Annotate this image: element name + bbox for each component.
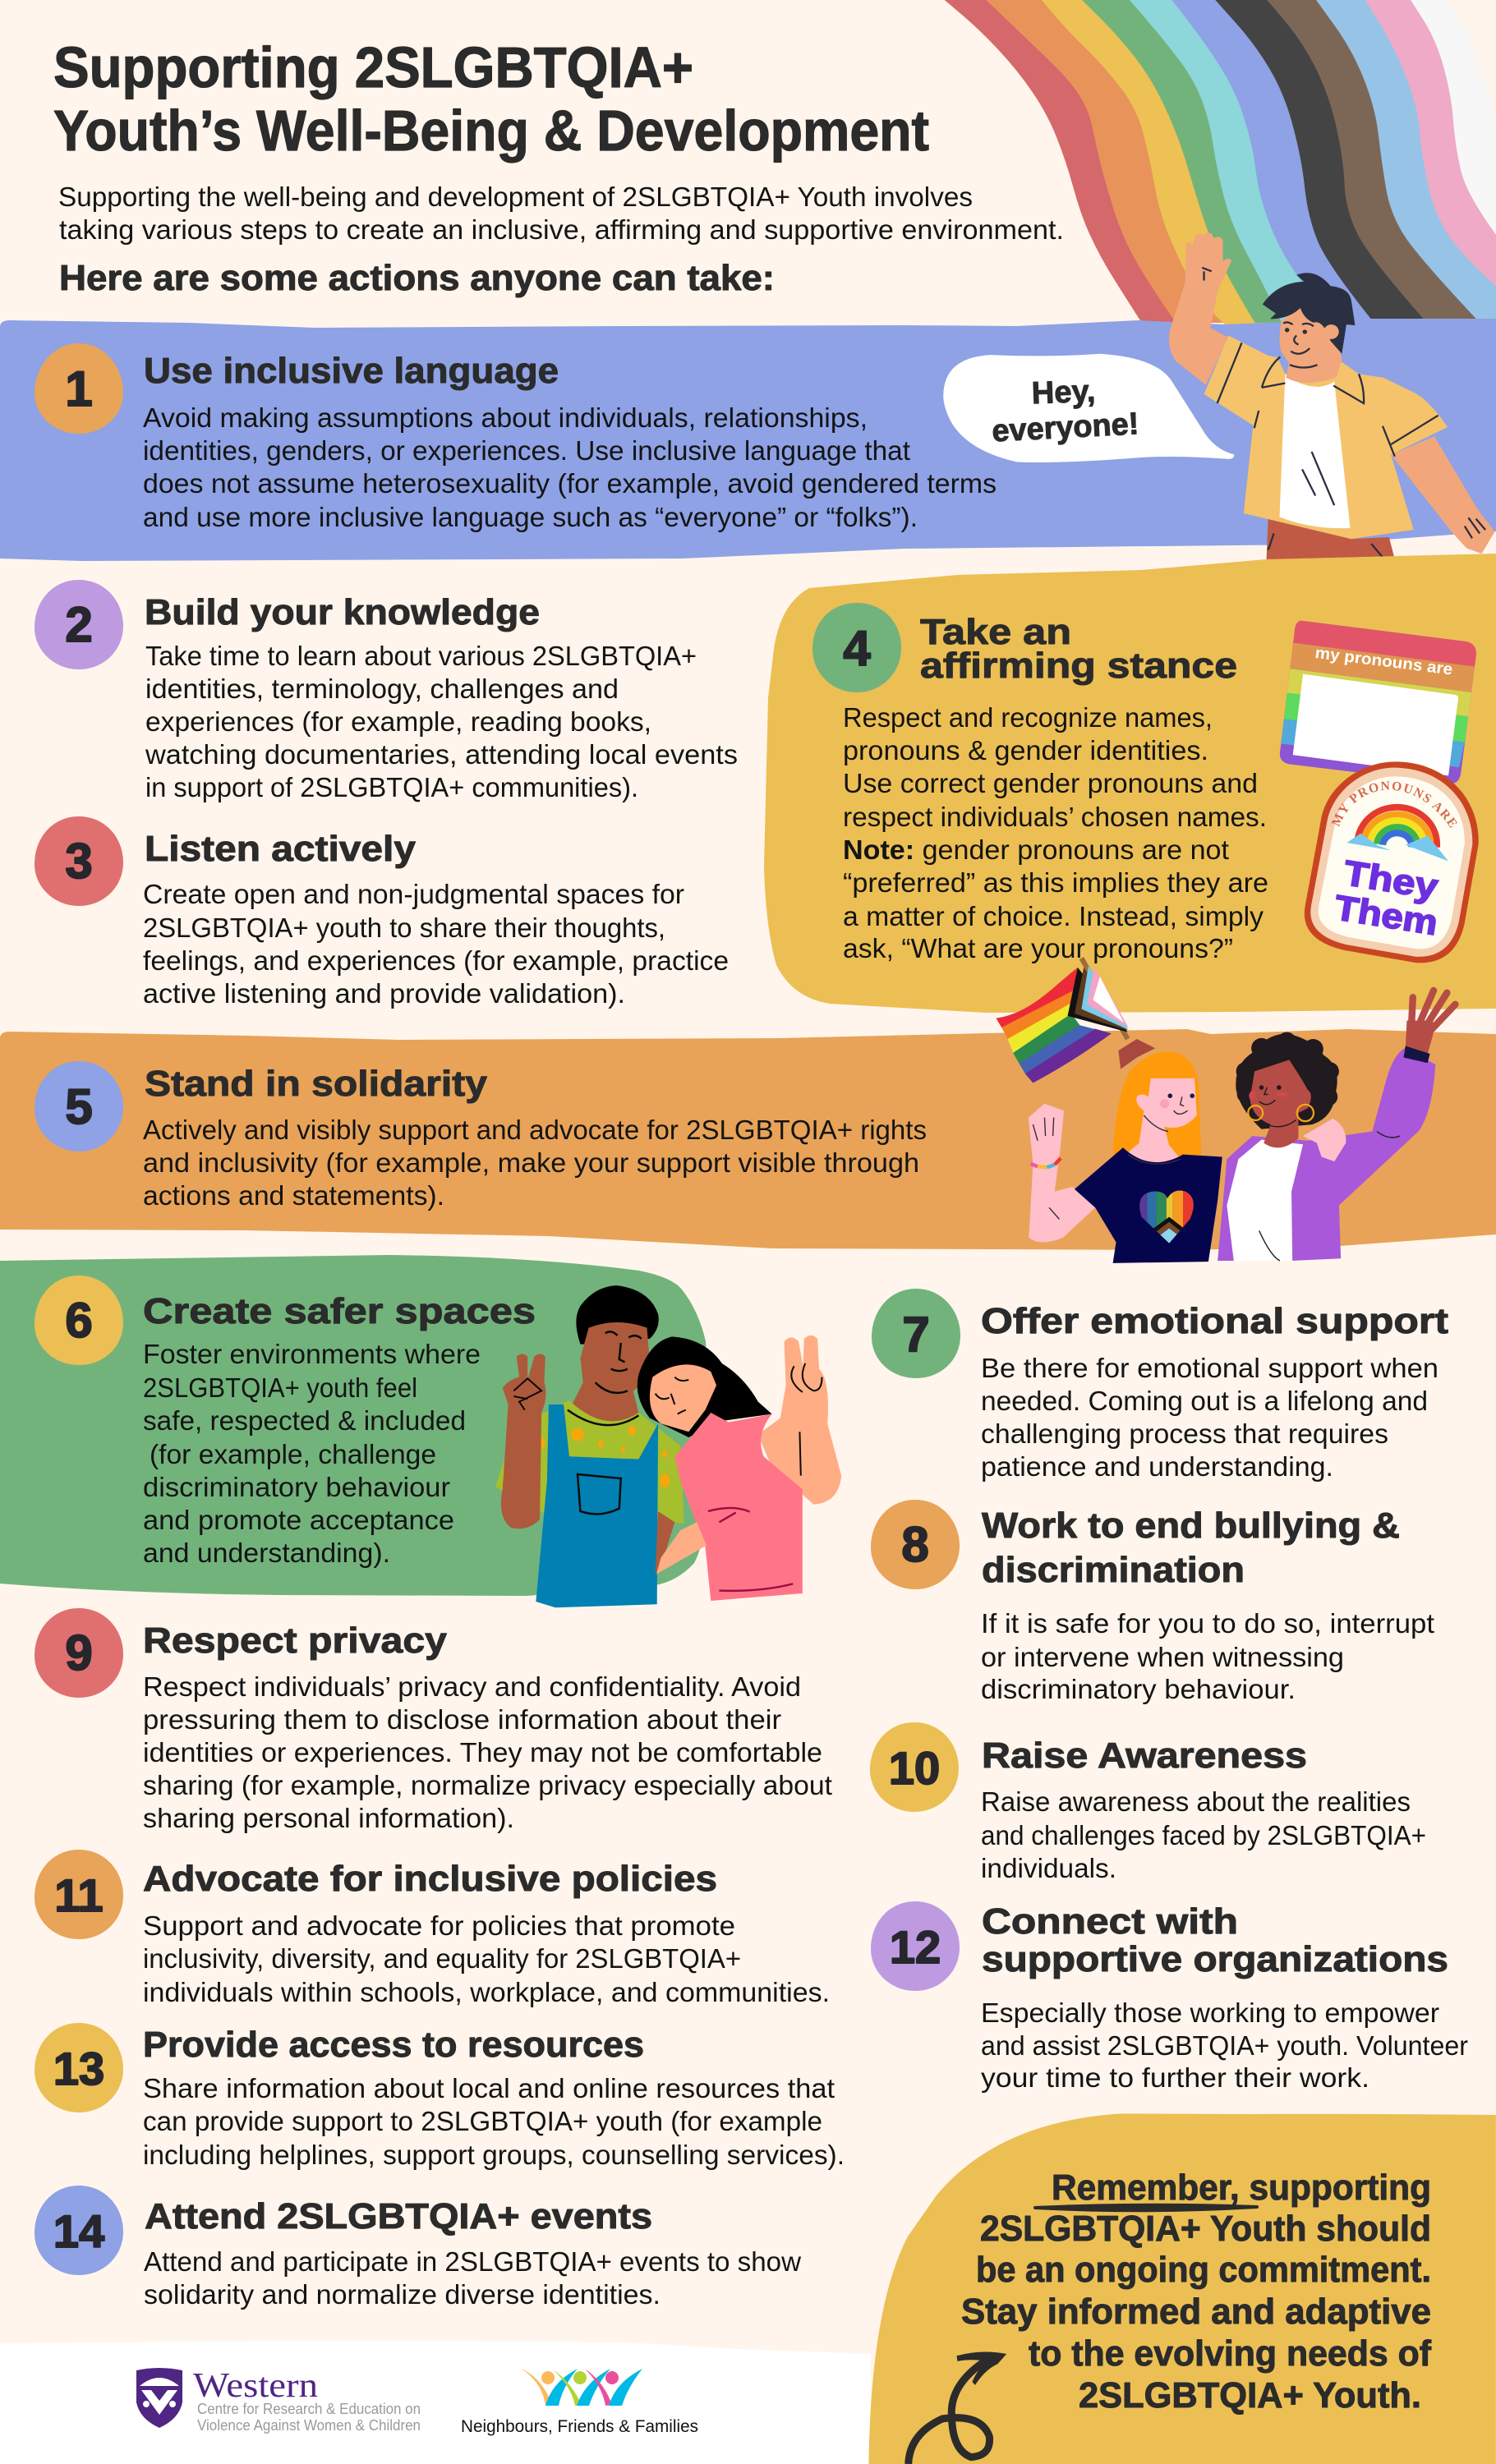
body 8: discriminatory behaviour. [981,1674,1296,1704]
body 4: Use correct gender pronouns and [843,768,1258,798]
step 11: advocate for inclusive policies [35,1850,830,2007]
panel: step 1 blue band [0,319,1496,561]
body 4: pronouns & gender identities. [843,735,1208,765]
logo: Western University: Violence Against Women & Children [197,2417,421,2434]
step 7: offer emotional support [872,1289,1448,1482]
callout text: to the evolving needs of [1029,2333,1431,2374]
body 4: ask, “What are your pronouns?” [843,933,1233,963]
heading 11: Advocate for inclusive policies [143,1859,717,1899]
heading 4: affirming stance [920,646,1237,686]
step 2: build your knowledge [35,580,738,802]
badge 2 [35,580,123,669]
They/Them pronoun badge: MY PRONOUNS ARE [1331,781,1457,828]
badge 10 [870,1722,959,1812]
body 10: Raise awareness about the realities [981,1786,1411,1817]
step 13: provide access to resources [35,2023,845,2170]
logo: Western University: Western [193,2367,318,2405]
badge 4: 4 [843,621,871,676]
body 1: does not assume heterosexuality (for example, avoid gendered terms [143,468,997,499]
logo: Neighbours, Friends & Families: Neighbours, Friends & Families [461,2417,698,2436]
badge 13: 13 [53,2043,104,2094]
intro paragraph: taking various steps to create an inclusive, affirming and supportive environment. [59,214,1064,245]
body 10: individuals. [981,1853,1116,1883]
body 7 [981,1353,1438,1482]
body 9: sharing (for example, normalize privacy especially about [143,1770,832,1800]
friend with orange hair [1029,1039,1222,1263]
subheading: Here are some actions anyone can take: [59,258,775,298]
intro paragraph [58,182,1064,245]
callout text: Remember, supporting [1052,2167,1431,2208]
footer white background [0,2341,871,2464]
badge 2: 2 [65,597,93,652]
pronoun name tag [1257,605,1496,798]
step 1: use inclusive language [35,343,997,532]
rainbow swoosh [945,0,1496,324]
badge 5 [35,1061,123,1152]
body 5 [143,1115,927,1211]
body 11 [143,1910,830,2007]
title: Youth’s Well-Being & Development [53,99,929,163]
friend with curly hair [1218,991,1455,1261]
body 9 [143,1671,832,1833]
step 5: stand in solidarity [35,1061,927,1211]
speech bubble: Hey, everyone!: Hey, [1031,375,1096,411]
callout text: be an ongoing commitment. [976,2250,1431,2290]
body 3: Create open and non-judgmental spaces for [143,879,684,909]
body 14 [144,2246,801,2310]
badge 6: 6 [65,1293,93,1348]
body 7: patience and understanding. [981,1451,1333,1482]
body 4: respect individuals’ chosen names. [843,802,1267,832]
body 11: inclusivity, diversity, and equality for 2SLGBTQIA+ [143,1943,741,1974]
body 13: including helplines, support groups, counselling services). [143,2140,845,2170]
body 3: feelings, and experiences (for example, practice [143,945,729,976]
heading 1: Use inclusive language [144,351,559,391]
panel: step 4 yellow panel [764,554,1496,1013]
badge 3: 3 [65,834,93,889]
title [53,35,929,163]
body 1 [143,402,997,532]
body 7: challenging process that requires [981,1418,1388,1449]
body 5: actions and statements). [143,1180,444,1211]
body 14: solidarity and normalize diverse identities. [144,2279,661,2310]
body 6: and promote acceptance [143,1505,454,1535]
body 8: If it is safe for you to do so, interrupt [981,1608,1434,1639]
badge 5: 5 [65,1079,93,1134]
body 6: discriminatory behaviour [143,1472,450,1502]
two friends with pride flag illustration [996,958,1455,1263]
body 8: or intervene when witnessing [981,1642,1344,1672]
underline [1035,2205,1257,2210]
They/Them pronoun badge [1305,761,1479,963]
body 4: a matter of choice. Instead, simply [843,901,1264,931]
body 2: Take time to learn about various 2SLGBTQIA+ [145,641,697,671]
heading 9: Respect privacy [143,1620,448,1661]
badge 1 [35,343,123,434]
body 1: and use more inclusive language such as “everyone” or “folks”). [143,502,918,532]
pride flag [996,958,1129,1083]
body 4: Note: gender pronouns are not [843,834,1229,865]
body 10 [981,1786,1426,1883]
body 4: “preferred” as this implies they are [843,867,1268,898]
body 3: 2SLGBTQIA+ youth to share their thoughts, [143,913,665,943]
body 11: Support and advocate for policies that promote [143,1910,735,1941]
body 1: Avoid making assumptions about individuals, relationships, [143,402,868,433]
body 9: Respect individuals’ privacy and confidentiality. Avoid [143,1671,801,1702]
heading 8: discrimination [982,1550,1245,1590]
heading 13: Provide access to resources [143,2025,644,2065]
step 8: work to end bullying and discrimination [871,1500,1434,1704]
body 6: safe, respected & included [143,1405,466,1436]
body 11: individuals within schools, workplace, and communities. [143,1977,830,2007]
step 14: attend events [35,2186,801,2310]
body 2: in support of 2SLGBTQIA+ communities). [145,772,638,802]
badge 7 [872,1289,960,1378]
body 2: watching documentaries, attending local events [145,739,738,770]
body 6 [143,1339,481,1568]
body 4: Respect and recognize names, [843,702,1213,733]
body 14: Attend and participate in 2SLGBTQIA+ events to show [144,2246,801,2277]
logo: Western University: Centre for Research & Education on [197,2401,421,2417]
pronoun name tag: my pronouns are [1314,644,1454,678]
icon: curly arrow [909,2351,1006,2464]
logo: Western University [136,2367,421,2434]
body 4 [843,702,1268,963]
panel: remember callout [868,2113,1496,2464]
step 10: raise awareness [870,1722,1426,1883]
body 9: pressuring them to disclose information about their [143,1704,781,1735]
body 1: identities, genders, or experiences. Use inclusive language that [143,435,910,466]
badge 7: 7 [902,1307,930,1362]
heading 3: Listen actively [145,829,417,869]
badge 9: 9 [65,1625,93,1680]
body 5: Actively and visibly support and advocate for 2SLGBTQIA+ rights [143,1115,927,1145]
logo: Neighbours, Friends & Families [461,2369,698,2436]
badge 11: 11 [54,1869,104,1921]
callout text: 2SLGBTQIA+ Youth should [980,2209,1431,2249]
body 13: can provide support to 2SLGBTQIA+ youth (for example [143,2106,822,2136]
heading 12: supportive organizations [982,1939,1448,1979]
callout text: 2SLGBTQIA+ Youth. [1079,2375,1421,2416]
person in blue overalls [495,1285,684,1607]
step 3: listen actively [35,816,729,1009]
badge 14 [35,2186,123,2275]
badge 8: 8 [901,1517,929,1572]
callout text [961,2167,1431,2416]
hugging couple illustration [495,1285,841,1607]
body 6: 2SLGBTQIA+ youth feel [143,1372,417,1403]
step 6: create safer spaces [35,1276,536,1568]
badge 6 [35,1276,123,1365]
badge 3 [35,816,123,906]
step 12: connect with supportive organizations [871,1901,1468,2093]
waving man illustration [1169,232,1495,563]
badge 12: 12 [890,1921,941,1973]
badge 1: 1 [65,361,93,416]
body 8 [981,1608,1434,1704]
body 12: your time to further their work. [981,2062,1369,2093]
body 5: and inclusivity (for example, make your support visible through [143,1147,919,1178]
body 13: Share information about local and online resources that [143,2073,835,2103]
body 9: sharing personal information). [143,1803,514,1833]
body 10: and challenges faced by 2SLGBTQIA+ [981,1820,1426,1850]
heading 7: Offer emotional support [981,1301,1448,1341]
heading 5: Stand in solidarity [145,1064,488,1104]
heading 14: Attend 2SLGBTQIA+ events [145,2196,652,2236]
heading 4: Take an [920,612,1071,652]
badge 4 [812,603,901,692]
heading 4 [920,612,1237,686]
badge 10: 10 [889,1742,940,1794]
body 3: active listening and provide validation). [143,978,625,1009]
step 4: take an affirming stance [812,603,1268,963]
They/Them pronoun badge: Them [1332,888,1440,943]
heading 6: Create safer spaces [143,1291,536,1331]
body 12 [981,1997,1468,2093]
badge 8 [871,1500,960,1589]
badge 14: 14 [53,2205,104,2257]
callout text: Stay informed and adaptive [961,2292,1431,2332]
body 7: needed. Coming out is a lifelong and [981,1386,1428,1416]
body 2: experiences (for example, reading books, [145,706,651,737]
body 2: identities, terminology, challenges and [145,673,619,704]
heading 12: Connect with [982,1901,1238,1942]
body 9: identities or experiences. They may not be comfortable [143,1737,822,1768]
heading 2: Build your knowledge [145,592,540,632]
body 13 [143,2073,845,2170]
person in pink top [638,1335,841,1601]
panel: step 9 respect privacy [35,1608,832,1833]
intro paragraph: Supporting the well-being and development of 2SLGBTQIA+ Youth involves [58,182,973,212]
speech bubble: Hey, everyone! [943,354,1234,462]
heading 12 [982,1901,1448,1979]
heading 8: Work to end bullying & [982,1506,1400,1546]
heading 8 [982,1506,1400,1590]
body 6: Foster environments where [143,1339,481,1369]
speech bubble: Hey, everyone!: everyone! [991,407,1139,449]
panel: step 5 orange band [0,1029,1496,1250]
badge 13 [35,2023,123,2112]
body 12: Especially those working to empower [981,1997,1439,2028]
badge 11 [35,1850,123,1939]
body 3 [143,879,729,1009]
body 6: (for example, challenge [150,1439,436,1469]
heading 10: Raise Awareness [982,1735,1307,1776]
body 6: and understanding). [143,1538,390,1568]
They/Them pronoun badge: They [1341,853,1441,908]
panel: step 6 green panel [0,1255,711,1596]
badge 9 [35,1608,123,1698]
body 7: Be there for emotional support when [981,1353,1438,1383]
body 2 [145,641,738,802]
body 12: and assist 2SLGBTQIA+ youth. Volunteer [981,2030,1468,2061]
title: Supporting 2SLGBTQIA+ [53,35,693,99]
badge 12 [871,1901,960,1991]
